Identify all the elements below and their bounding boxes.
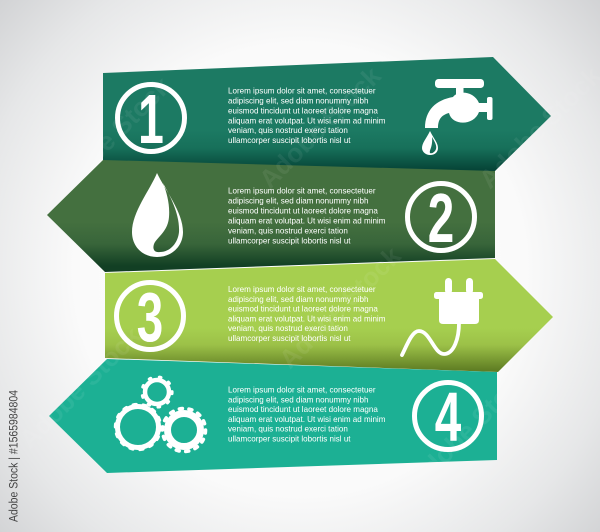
text block 1: aliquam erat volutpat. Ut wisi enim ad minim [228,116,386,126]
banner 3: plug [105,259,553,372]
number 2 badge: 2 [428,179,454,257]
faint diagonal watermark: Adobe Stock [273,240,407,374]
text block 2: aliquam erat volutpat. Ut wisi enim ad minim [228,216,386,226]
text block 2: Lorem ipsum dolor sit amet, consectetuer [228,186,376,196]
text block 4: veniam, quis nostrud exerci tation [228,424,348,434]
text block 4: aliquam erat volutpat. Ut wisi enim ad minim [228,415,386,424]
stock watermark id: Adobe Stock | #1565984804 [8,389,20,522]
text block 1: adipiscing elit, sed diam nonummy nibh [228,96,368,106]
faint diagonal watermark: Adobe Stock [253,60,387,194]
banner 2: water drop [47,160,495,272]
text block 4: Lorem ipsum dolor sit amet, consectetuer [228,386,376,394]
faint diagonal watermark: Adobe Stock [43,70,177,204]
text block 1 [228,86,386,145]
text block 3: adipiscing elit, sed diam nonummy nibh [228,295,368,304]
number 4 badge: 4 [435,378,461,456]
banner 1: tap [103,57,551,172]
text block 1: veniam, quis nostrud exerci tation [228,126,348,135]
text block 3: Lorem ipsum dolor sit amet, consectetuer [228,285,376,294]
text block 4: adipiscing elit, sed diam nonummy nibh [228,396,368,404]
number 2 badge [408,179,474,257]
text block 4: ullamcorper suscipit lobortis nisl ut [228,434,351,444]
icon: electric plug [402,278,483,355]
text block 4: euismod tincidunt ut laoreet dolore magna [228,405,378,414]
text block 3: euismod tincidunt ut laoreet dolore magna [228,304,378,314]
text block 3: veniam, quis nostrud exerci tation [228,324,348,333]
number 3 badge: 3 [137,278,163,356]
text block 3: aliquam erat volutpat. Ut wisi enim ad minim [228,314,386,324]
text block 3: ullamcorper suscipit lobortis nisl ut [228,334,351,343]
number 1 badge [118,79,184,158]
number 3 badge [116,278,184,356]
text block 3 [228,285,386,343]
faint diagonal watermark: Adobe Stock [13,320,147,454]
icon: leaf water drop [132,173,183,257]
text block 2: adipiscing elit, sed diam nonummy nibh [228,196,368,206]
text block 2: veniam, quis nostrud exerci tation [228,226,348,236]
text block 1: euismod tincidunt ut laoreet dolore magna [228,106,378,116]
text block 2: euismod tincidunt ut laoreet dolore magna [228,206,378,216]
text block 1: Lorem ipsum dolor sit amet, consectetuer [228,86,376,96]
icon: water tap [422,79,492,155]
banner 4: gears [49,359,497,473]
text block 2 [228,186,386,246]
number 1 badge: 1 [138,79,164,158]
faint diagonal watermark [13,60,600,494]
faint diagonal watermark: Adobe Stock [403,360,537,494]
text block 1: ullamcorper suscipit lobortis nisl ut [228,136,351,145]
text block 2: ullamcorper suscipit lobortis nisl ut [228,236,351,246]
number 4 badge [414,378,482,456]
icon: three gears [116,377,206,452]
text block 4 [228,386,386,444]
